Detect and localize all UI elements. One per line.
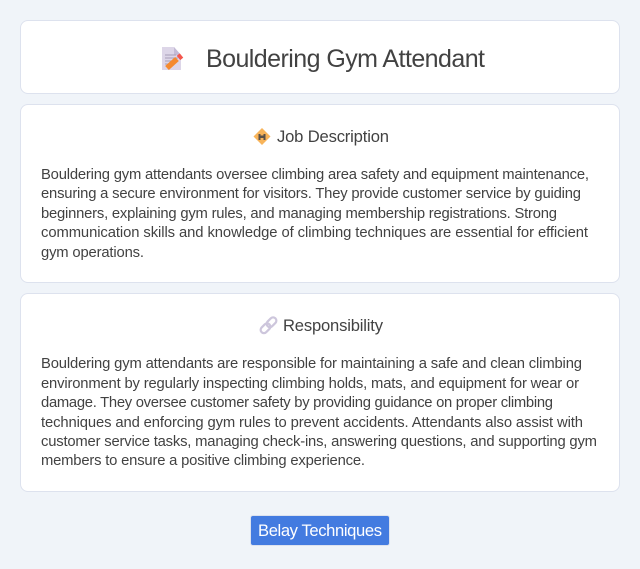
- text block: responsibility: members to ensure a positive climbing experience.: [41, 453, 365, 469]
- button: belay techniques: Belay Techniques: [258, 521, 382, 540]
- icon: chain link: [259, 316, 278, 334]
- text block: job description: gym operations.: [41, 245, 144, 261]
- text block: responsibility: damage. They oversee customer safety by providing guidance on proper climbing: [41, 395, 553, 411]
- text block: responsibility: customer service tasks, managing check-ins, answering questions, and supporting gym: [41, 434, 597, 450]
- text block: responsibility: Bouldering gym attendants are responsible for maintaining a safe and clean climbing: [41, 356, 582, 372]
- text block: job description: [41, 167, 589, 261]
- text block: job description: Bouldering gym attendants oversee climbing area safety and equipment maintenance,: [41, 167, 589, 183]
- text block: responsibility: environment by regularly inspecting climbing holds, mats, and equipment for wear or: [41, 376, 579, 392]
- text block: responsibility: techniques and enforcing gym rules to prevent accidents. Attendants also assist with: [41, 415, 583, 431]
- title: Bouldering Gym Attendant: [206, 45, 485, 73]
- heading: job description: Job Description: [277, 127, 389, 146]
- panel: job description card: [20, 104, 620, 283]
- panel: title card: [20, 20, 620, 94]
- icon: climbing diamond sign: [254, 128, 270, 145]
- heading: responsibility: Responsibility: [283, 316, 384, 335]
- icon: document with pencil: [162, 47, 182, 70]
- text block: job description: ensuring a secure environment for visitors. They provide customer service by guiding: [41, 186, 581, 202]
- panel: responsibility card: [20, 293, 620, 492]
- text block: job description: beginners, explaining gym rules, and managing membership registrations. Strong: [41, 206, 557, 222]
- button: belay techniques: [250, 516, 390, 546]
- text block: responsibility: [41, 356, 597, 469]
- text block: job description: communication skills and knowledge of climbing techniques are essential for efficient: [41, 225, 588, 241]
